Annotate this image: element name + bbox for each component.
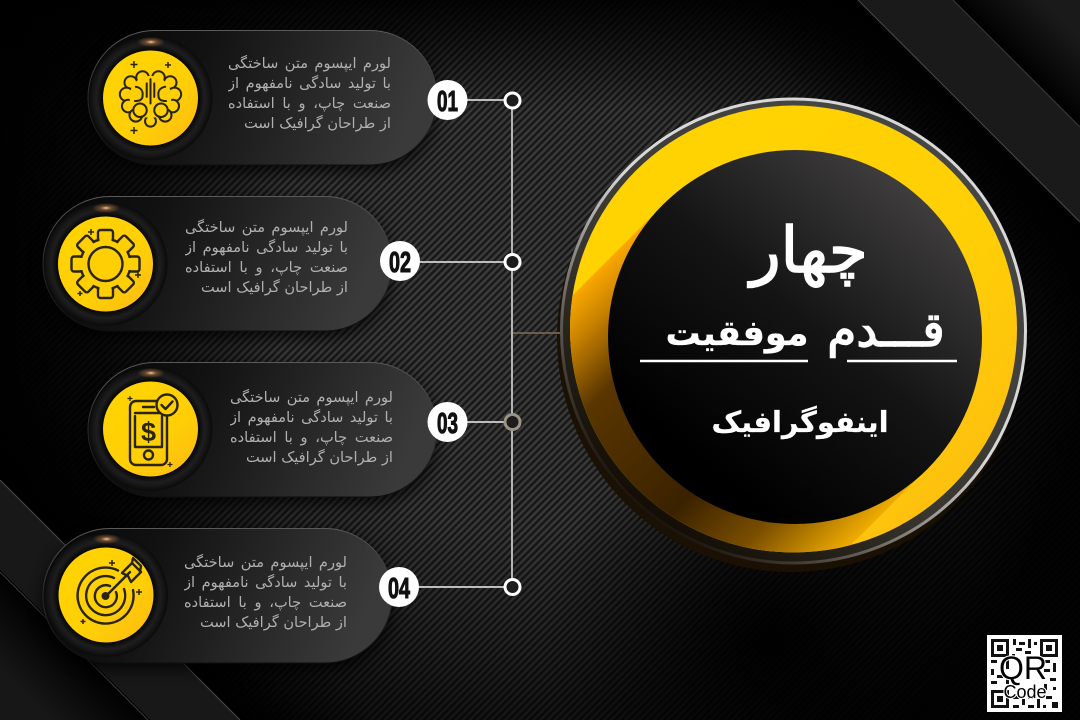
badge: 02 [380,241,420,281]
text block: از طراحان گرافیک است [201,279,348,296]
text block: لورم ایپسوم متن ساختگی [184,554,347,571]
text block [228,54,398,136]
badge: 02: 02 [389,247,411,279]
big circle: rings and yellow disc [560,98,1027,564]
panel: step 1 [88,30,468,165]
panel: step 2 [43,196,420,331]
text block [185,218,355,300]
badge: 04: 04 [388,573,410,605]
text block: با تولید سادگی نامفهوم از [230,409,393,426]
title: word two, steps: قـــدم [827,303,945,358]
badge: 03: 03 [437,408,458,440]
text block: لورم ایپسوم متن ساختگی [228,55,391,72]
text block: لورم ایپسوم متن ساختگی [185,219,348,236]
badge: 03 [428,402,468,442]
title: word three, success: موفقیت [665,314,809,354]
icon: phone with dollar: $ [141,417,156,447]
panel: step 4 [43,528,419,663]
background: top-right diagonal band [700,0,1080,400]
badge: 01 [428,80,468,120]
text block: از طراحان گرافیک است [246,449,393,466]
icon: target with arrow [44,533,168,657]
subtitle: اینفوگرافیک [711,405,889,439]
text block [184,553,354,635]
icon: gear [44,202,168,326]
big circle: outer shadow [557,104,1025,572]
badge: 04 [379,567,419,607]
icon: brain [88,36,212,160]
text block: با تولید سادگی نامفهوم از [184,574,347,591]
title: word one: چهار [747,214,868,288]
QR code [987,635,1062,712]
text block: صنعت چاپ، و با استفاده [230,429,393,446]
icon: phone with dollar [88,367,212,491]
QR label: QR [999,650,1047,686]
background: bottom-left diagonal band [0,300,420,720]
text block: از طراحان گرافیک است [244,115,391,132]
text block: با تولید سادگی نامفهوم از [185,239,348,256]
text block: صنعت چاپ، و با استفاده [185,259,348,276]
text block: با تولید سادگی نامفهوم از [228,75,391,92]
badge: 01: 01 [437,86,458,118]
panel: step 3 [88,362,468,497]
text block: از طراحان گرافیک است [200,614,347,631]
text block: صنعت چاپ، و با استفاده [184,594,347,611]
QR sublabel: Code [1003,682,1047,702]
title underline [640,360,957,362]
text block: صنعت چاپ، و با استفاده [228,95,391,112]
connector lines [418,100,562,587]
connector nodes [505,93,520,594]
text block [230,388,400,470]
text block: لورم ایپسوم متن ساختگی [230,389,393,406]
